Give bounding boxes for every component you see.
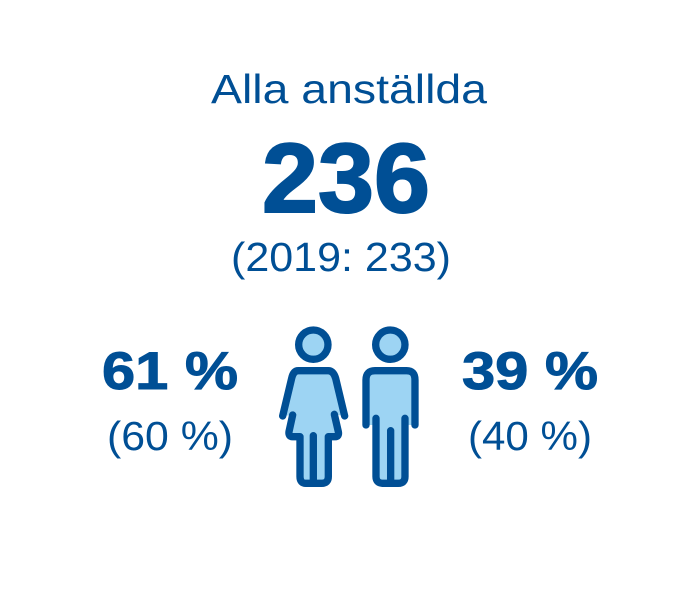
icon: man: [366, 330, 415, 483]
total employees number: 236: [262, 123, 430, 233]
heading: all employees: Alla anställda: [211, 66, 487, 112]
previous year total: (2019: 233): [231, 234, 451, 280]
women share previous year: (60 %): [107, 413, 233, 459]
men share: 39 %: [462, 342, 598, 401]
men share previous year: (40 %): [468, 413, 592, 459]
women share: 61 %: [102, 342, 238, 401]
icon: woman: [283, 330, 345, 483]
